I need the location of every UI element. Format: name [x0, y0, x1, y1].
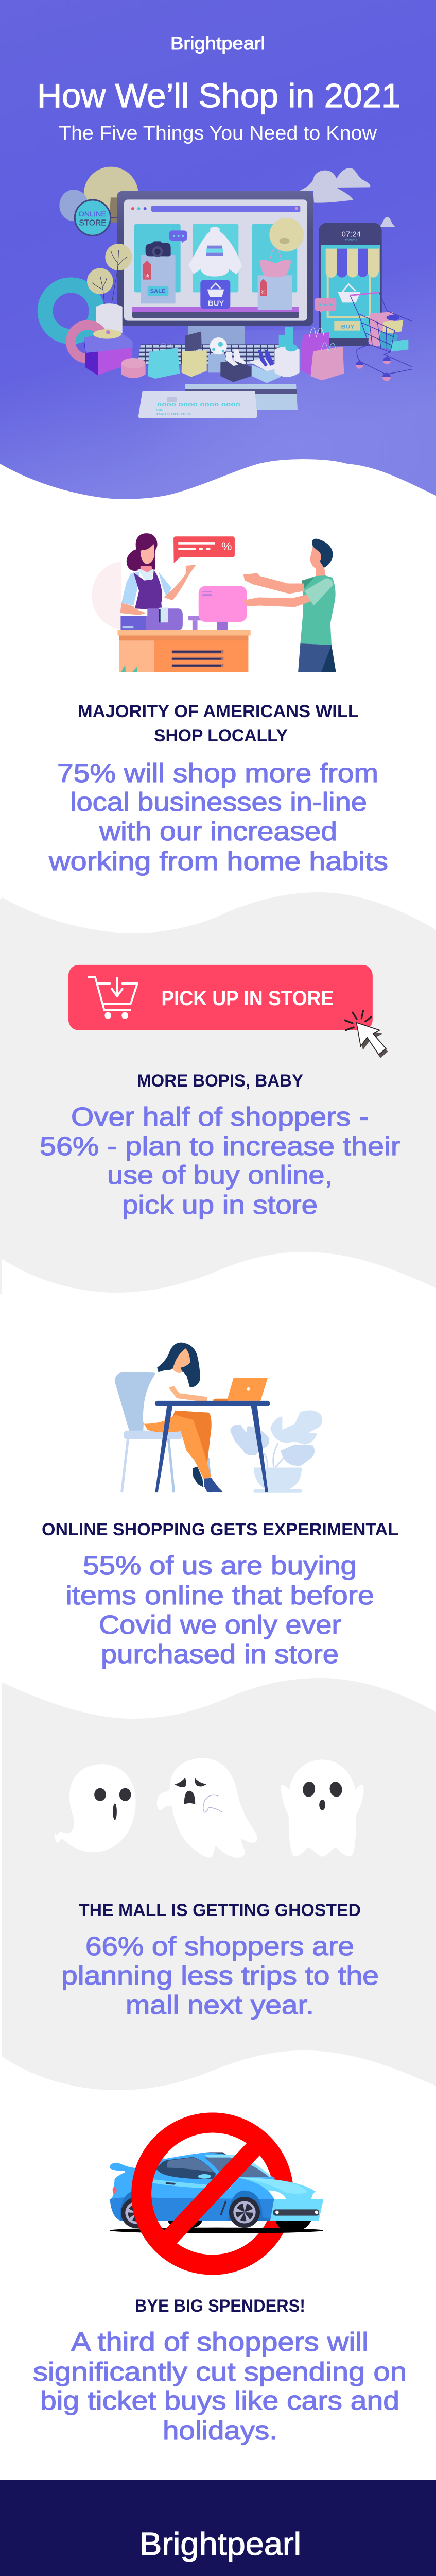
title: How We’ll Shop in 2021 [37, 77, 400, 114]
icon: cart [89, 977, 137, 1018]
monitor stand [188, 325, 245, 349]
body text: 66% of shoppers are [85, 1931, 354, 1961]
button: pick up in store [68, 965, 388, 1058]
buy button: BUY [208, 299, 224, 308]
body text: 75% will shop more from [57, 758, 378, 788]
body text: pick up in store [122, 1190, 318, 1219]
counter [118, 630, 251, 672]
car [110, 2152, 323, 2233]
grille [273, 2209, 319, 2216]
camera [146, 241, 171, 257]
body text: Covid we only ever [99, 1610, 341, 1639]
dark box with sneakers [220, 349, 251, 382]
round pink box [121, 358, 146, 378]
ghost right [281, 1759, 364, 1857]
illustration: woman at laptop [115, 1343, 322, 1493]
clouds [299, 168, 395, 227]
prohibition ring back [142, 2123, 284, 2265]
prohibition sign front [142, 2123, 284, 2265]
plant and pot [87, 244, 132, 333]
illustration: three ghosts [55, 1758, 364, 1858]
customer [243, 539, 336, 672]
body text: planning less trips to the [61, 1961, 379, 1990]
cash register [120, 608, 183, 630]
logo: Brightpearl: Brightpearl [139, 2527, 301, 2562]
heading: MORE BOPIS, BABY [137, 1071, 303, 1091]
sand bag with dark card [182, 331, 207, 377]
heading: THE MALL IS GETTING GHOSTED [79, 1901, 361, 1920]
gift box [84, 329, 133, 375]
illustration: shop assistant and customer [92, 533, 336, 672]
teal ring [45, 285, 97, 336]
heading [78, 702, 359, 745]
buy button [200, 280, 230, 309]
assistant [120, 533, 196, 615]
body text: 55% of us are buying [83, 1551, 357, 1580]
credit cards [138, 384, 298, 418]
right box with hat and bag [258, 218, 304, 310]
purple shopping bag [300, 328, 329, 375]
panel: shop locally [48, 533, 388, 876]
body text: use of buy online, [107, 1160, 333, 1190]
body text: items online that before [65, 1581, 374, 1610]
monitor screen [124, 199, 307, 321]
monitor frame [117, 191, 313, 326]
speech bubble: % [221, 541, 232, 553]
shelf [132, 307, 299, 318]
phone [319, 223, 382, 346]
button label: PICK UP IN STORE [161, 987, 334, 1010]
body text: with our increased [99, 817, 337, 846]
plant [230, 1410, 322, 1493]
sweater [188, 227, 242, 277]
laptop [213, 1378, 268, 1401]
logo: Brightpearl: Brightpearl [170, 33, 265, 54]
body text: purchased in store [101, 1639, 339, 1669]
ghost left [55, 1764, 136, 1852]
pink chat bubble [315, 298, 336, 313]
right area: phone and bags, coordinates offset by 1050 [299, 168, 412, 381]
body text: working from home habits [48, 846, 388, 876]
shopping cart [350, 293, 412, 381]
pale circle [92, 562, 121, 629]
table [155, 1401, 270, 1492]
pink shopping bag [310, 343, 344, 380]
front wheel [229, 2197, 260, 2228]
sign: online store: STORE [79, 218, 107, 227]
credit cards: 0000 [156, 409, 164, 412]
body text: local businesses in-line [70, 787, 367, 817]
white cylinder with teal bars [274, 327, 300, 377]
heading: BYE BIG SPENDERS! [135, 2296, 305, 2316]
body text [40, 1102, 400, 1219]
credit cards: 0000 0000 0000 0000 [157, 402, 240, 408]
left box with sale label: % [144, 273, 149, 279]
icon: cursor click [345, 1011, 388, 1058]
phone: BUY [341, 324, 355, 330]
illustration: online store scene [45, 167, 412, 418]
woman [143, 1343, 223, 1492]
light box with heels [249, 349, 281, 383]
panel: BOPIS [40, 965, 400, 1219]
teal shopping bag [148, 343, 180, 379]
body text: A third of shoppers will [71, 2327, 369, 2357]
phone: 07:24 [342, 230, 361, 239]
chat bubble [169, 230, 187, 243]
body text: big ticket buys like cars and [40, 2386, 399, 2415]
body text: Over half of shoppers - [71, 1102, 369, 1131]
body text: significantly cut spending on [33, 2357, 407, 2386]
hero background wave [0, 0, 436, 499]
body text: 56% - plan to increase their [40, 1131, 400, 1161]
credit cards: CARD HOLDER [156, 413, 191, 416]
panel: mall ghosted [55, 1758, 379, 2020]
panel: footer [0, 2480, 436, 2576]
phone: MONDAY [345, 239, 357, 241]
body text: holidays. [163, 2416, 277, 2445]
card reader and screen [188, 586, 247, 630]
speech bubble [173, 536, 235, 563]
sign: online store: ONLINE [79, 210, 106, 218]
panel: big spenders [33, 2123, 407, 2445]
heading: ONLINE SHOPPING GETS EXPERIMENTAL [42, 1520, 398, 1539]
right box with hat and bag: % [261, 290, 266, 296]
body text [48, 758, 388, 876]
pink ring [71, 325, 104, 359]
sand circle [84, 167, 138, 222]
chair [115, 1372, 212, 1492]
body text: mall next year. [126, 1990, 314, 2020]
left box with sale label: SALE [150, 289, 166, 295]
panel: online shopping [42, 1343, 398, 1669]
connector of sign [110, 217, 118, 218]
panel: hero header [0, 0, 436, 499]
blue circle [59, 190, 88, 221]
left box with sale label [141, 255, 176, 303]
heading: SHOP LOCALLY [154, 726, 288, 745]
heading: MAJORITY OF AMERICANS WILL [78, 702, 359, 721]
body text [65, 1551, 374, 1669]
body text [33, 2327, 407, 2445]
keyboard [137, 344, 281, 364]
illustration: car with prohibition sign [110, 2123, 323, 2265]
rear wheel [121, 2197, 152, 2228]
football and stand [208, 337, 227, 372]
sign: online store [75, 200, 111, 235]
body text [61, 1931, 379, 2020]
ghost middle [157, 1758, 257, 1858]
subtitle: The Five Things You Need to Know [59, 123, 377, 144]
